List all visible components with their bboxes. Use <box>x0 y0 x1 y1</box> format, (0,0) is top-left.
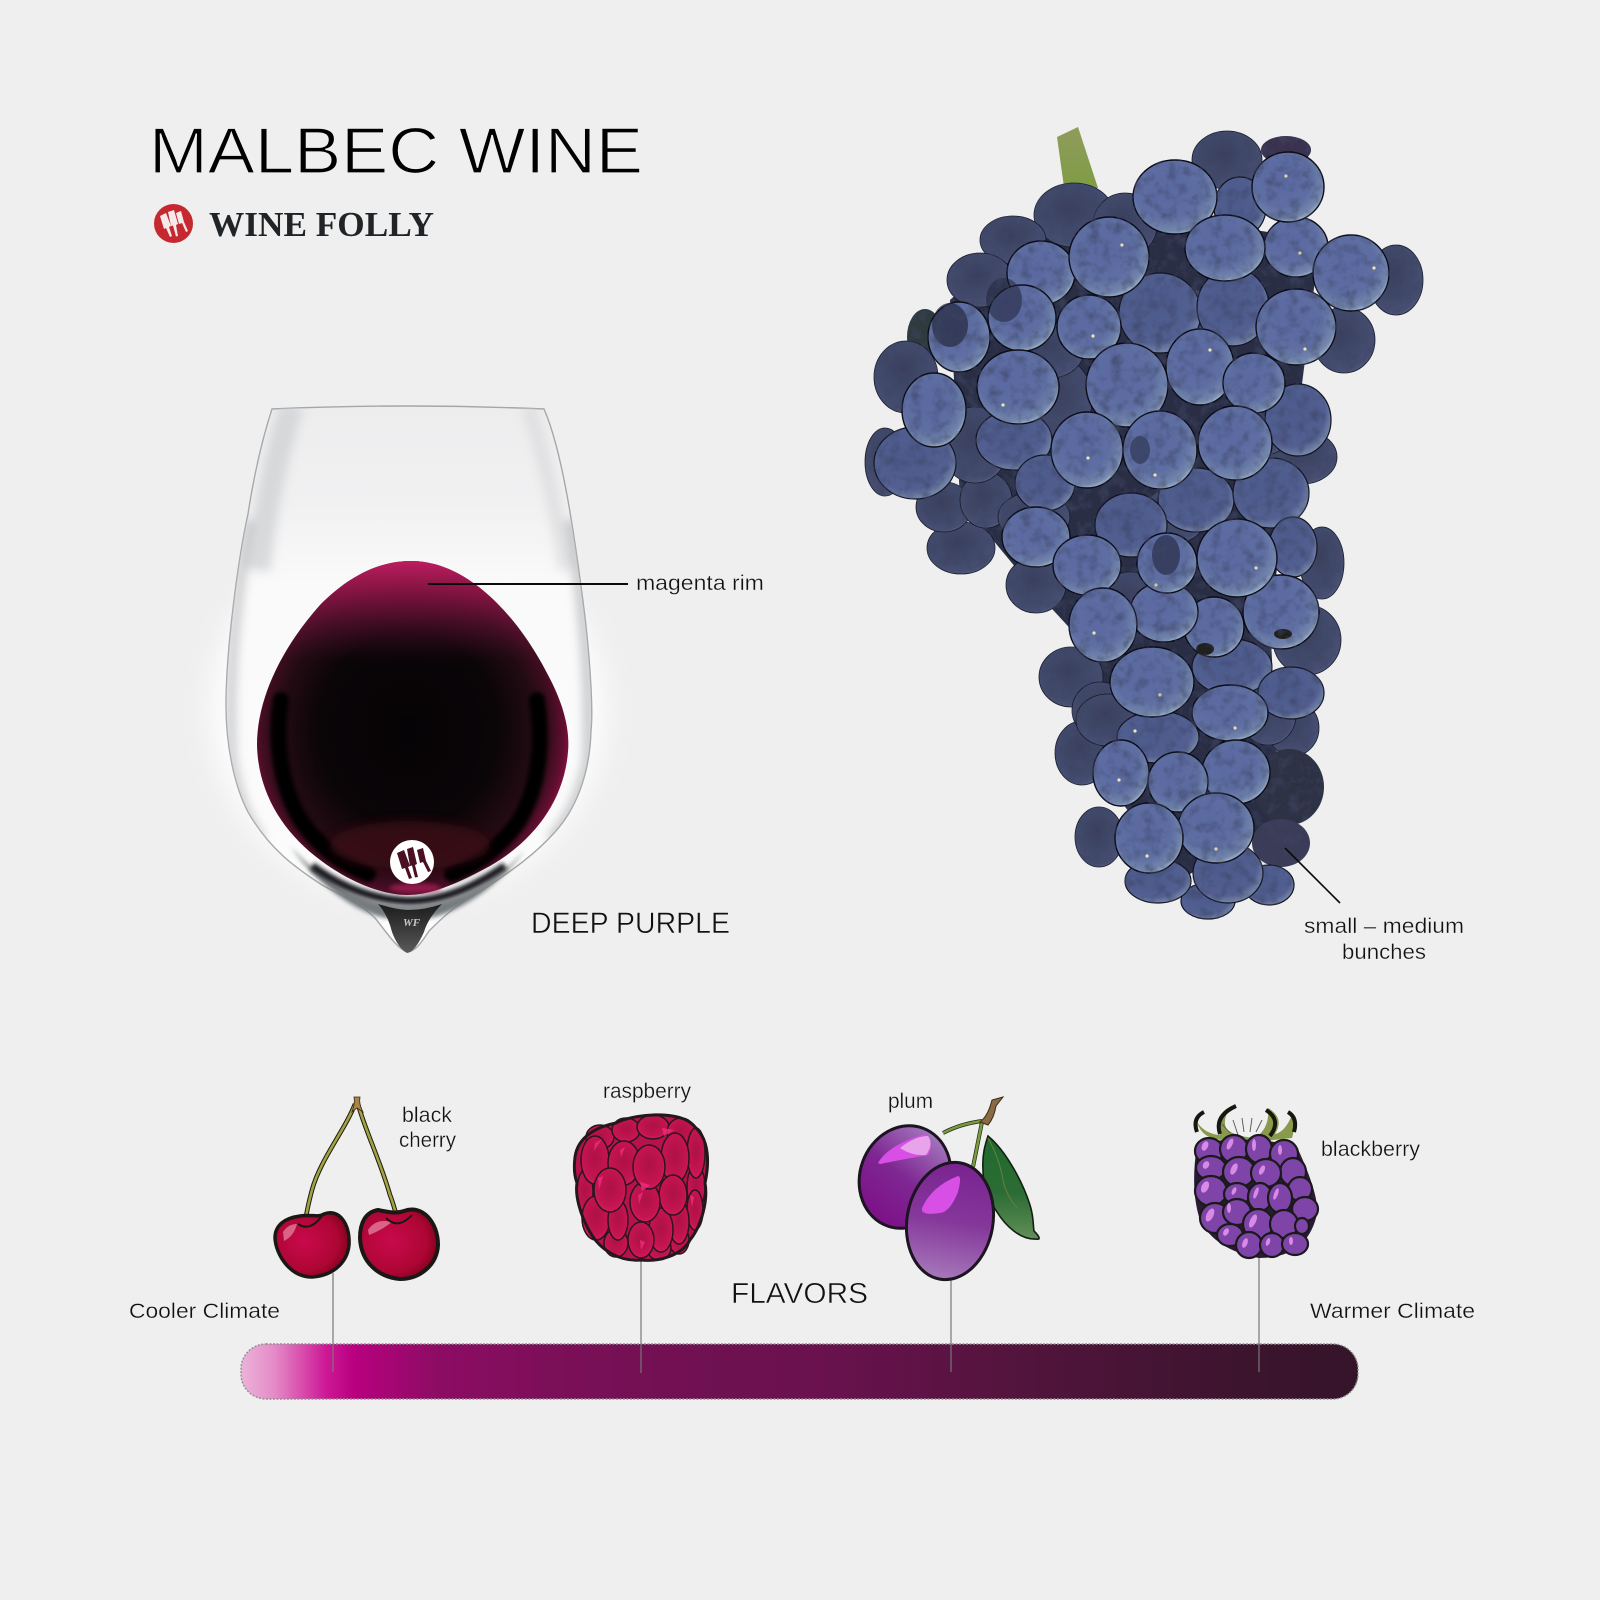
marker line <box>332 1273 334 1372</box>
flavor label: raspberry <box>603 1080 691 1103</box>
flavor label: plum <box>888 1090 933 1113</box>
glass bowl <box>226 406 592 952</box>
icon: plums <box>845 1097 1039 1287</box>
middle berries <box>874 177 1331 903</box>
front berries <box>902 152 1389 873</box>
drupe highlights <box>1199 1138 1293 1249</box>
drupes <box>1195 1135 1318 1258</box>
callout: magenta rim: magenta rim <box>636 572 764 595</box>
wordmark: WINE FOLLY <box>209 205 434 244</box>
climate gradient bar <box>241 1344 1358 1399</box>
glass stem tip <box>378 904 442 953</box>
bunch shadow core <box>950 200 1320 880</box>
berry blotches and seed dots <box>932 174 1376 858</box>
wine body <box>257 561 568 895</box>
icon: white bottle badge <box>390 840 434 884</box>
glass edge shading <box>231 405 589 840</box>
twig <box>943 1121 982 1133</box>
icon: red bottle badge <box>154 204 193 243</box>
flavor: black cherry <box>275 1097 456 1372</box>
dark base of bowl <box>290 846 525 918</box>
drupelet highlights <box>594 1128 694 1250</box>
flavor: plum <box>845 1090 1039 1372</box>
flavor: blackberry <box>1194 1106 1421 1372</box>
flavor: raspberry <box>574 1080 708 1373</box>
wine colour label: DEEP PURPLE <box>531 907 730 940</box>
filler berries <box>941 193 1296 746</box>
engraved WF: WF <box>403 917 421 929</box>
leaf <box>983 1136 1039 1239</box>
wine magenta rim <box>257 561 568 895</box>
berry body <box>1194 1140 1317 1258</box>
wine glass <box>210 405 606 953</box>
icon: raspberry <box>574 1115 708 1260</box>
grape berries <box>865 131 1423 919</box>
flavor label: cherry <box>399 1129 456 1152</box>
marker line <box>950 1278 952 1372</box>
marker line <box>640 1258 642 1373</box>
drupelets <box>577 1115 705 1260</box>
flavor label: black <box>402 1104 453 1127</box>
label: warmer climate: Warmer Climate <box>1310 1300 1475 1323</box>
callout: small - medium bunches <box>1285 848 1464 964</box>
grape bunch <box>865 127 1423 919</box>
title: MALBEC WINE <box>149 114 643 187</box>
glass glow <box>210 520 606 900</box>
icon: blackberry <box>1194 1106 1318 1258</box>
brand logo: Wine Folly <box>154 204 434 244</box>
raspberry outline <box>574 1115 708 1260</box>
callout: small - medium bunches: bunches <box>1342 941 1426 964</box>
flavor label: blackberry <box>1321 1138 1421 1161</box>
wine bottom red glow <box>330 821 490 869</box>
grape stem <box>1057 127 1098 188</box>
calyx <box>1196 1106 1295 1142</box>
marker line <box>1258 1255 1260 1372</box>
flavor label <box>399 1104 456 1152</box>
callout: small - medium bunches: small – medium <box>1304 915 1464 938</box>
back berries <box>865 131 1423 919</box>
icon: cherries <box>275 1097 438 1279</box>
wine inner dark crescents <box>279 700 540 874</box>
front plum <box>897 1155 1003 1287</box>
back plum <box>845 1113 965 1241</box>
label: cooler climate: Cooler Climate <box>129 1300 280 1323</box>
flavors heading: FLAVORS <box>731 1278 868 1310</box>
